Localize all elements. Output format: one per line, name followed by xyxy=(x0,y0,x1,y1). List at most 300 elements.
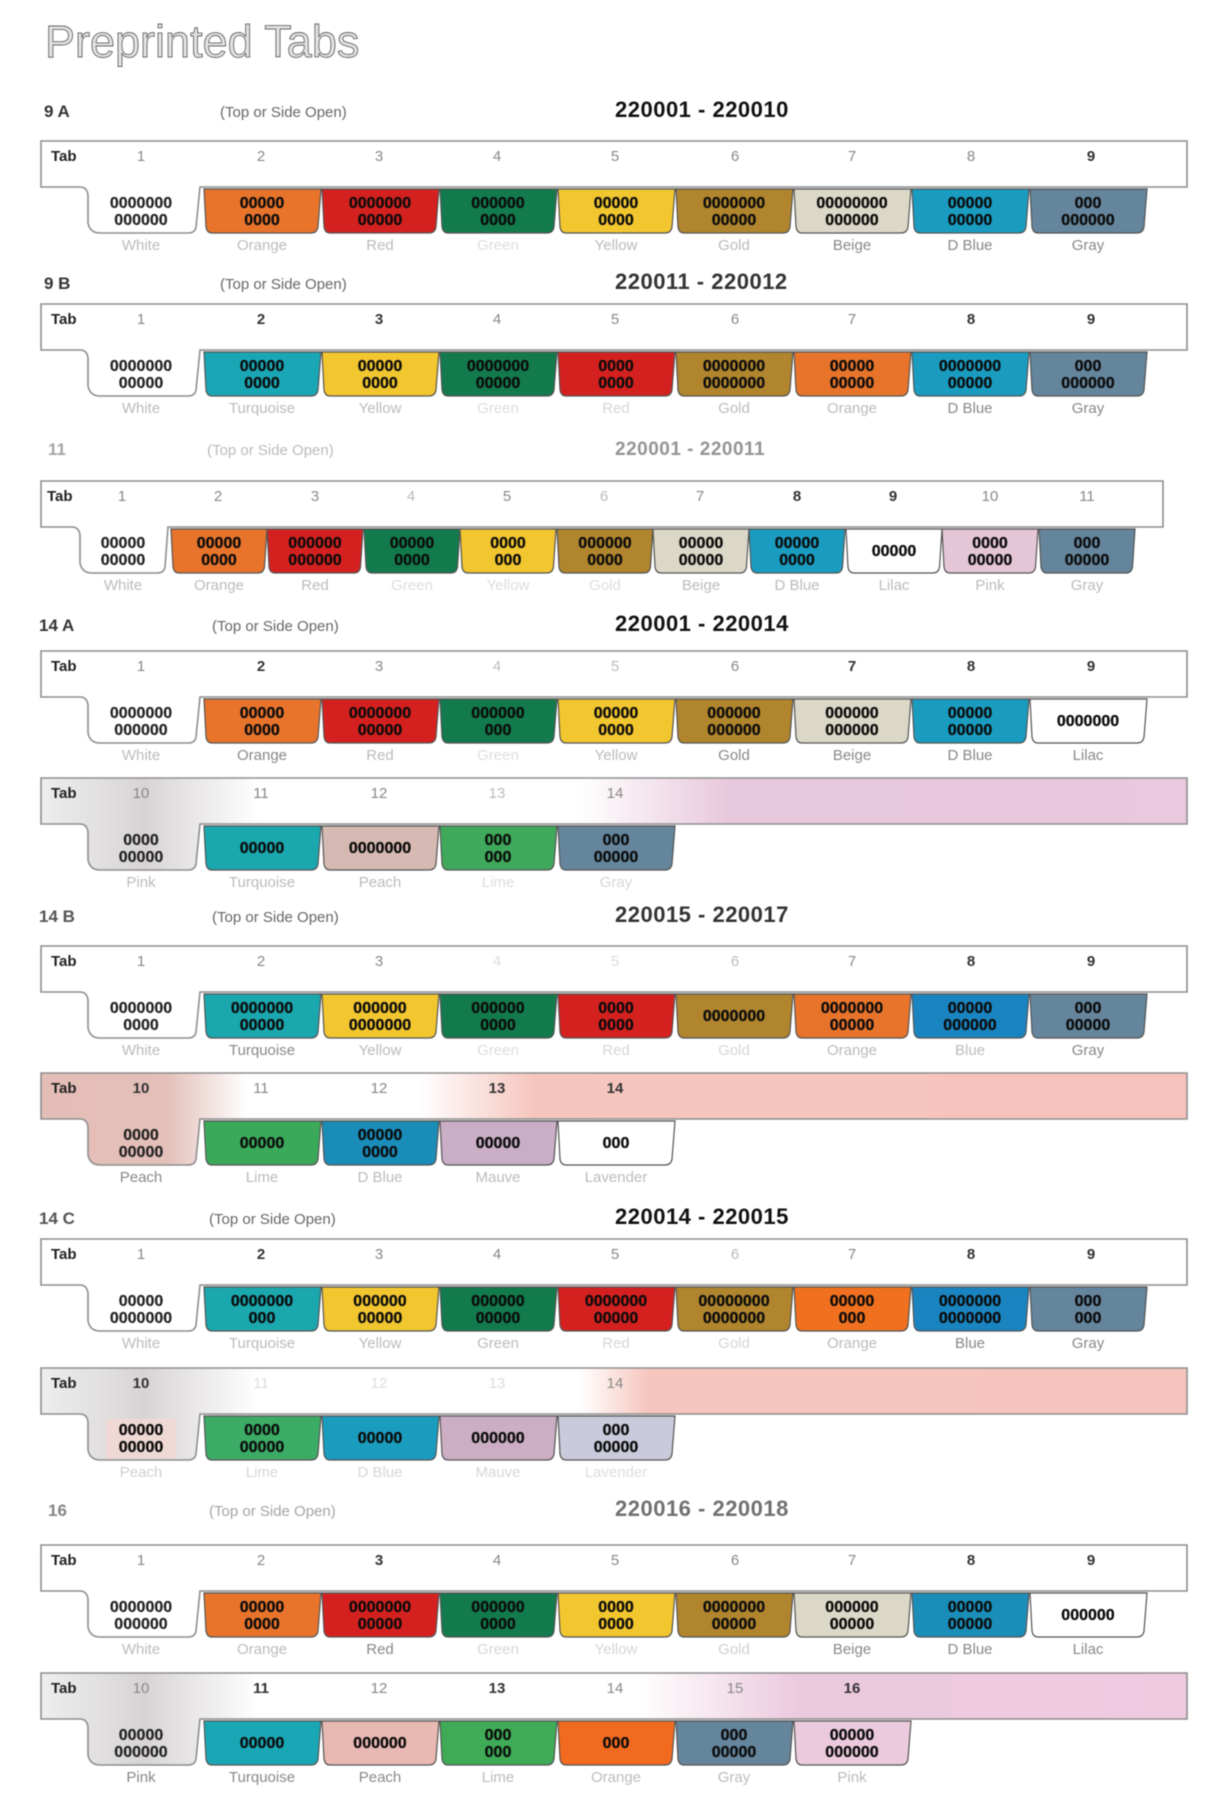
tab: orange: Orange xyxy=(237,237,287,254)
tab: yellow: 0000 xyxy=(362,375,398,392)
tab: dark blue xyxy=(912,189,1029,254)
tab: white: 0000000 xyxy=(110,1000,172,1017)
tab bar: tabs 10 to 16: 12 xyxy=(371,1680,387,1697)
tab bar: tabs 1 to 9: 3 xyxy=(375,658,383,675)
tab bar: tabs 1 to 9 xyxy=(41,651,1187,764)
tab: white: 00000 xyxy=(119,375,163,392)
section heading: 9 A xyxy=(44,102,70,121)
tab: lime: Lime xyxy=(482,1769,514,1786)
tab: green: 0000 xyxy=(480,1616,516,1633)
tab: red xyxy=(558,352,675,417)
tab: dark blue: 00000 xyxy=(948,1599,992,1616)
tab: white: White xyxy=(104,577,142,594)
tab: turquoise: 00000 xyxy=(240,840,284,857)
tab: orange: 0000 xyxy=(244,212,280,229)
tab: red xyxy=(322,1593,439,1658)
tab bar: tabs 1 to 9: 8 xyxy=(967,658,975,675)
title: Preprinted Tabs xyxy=(45,16,359,67)
tab: orange: 0000 xyxy=(244,722,280,739)
tab bar: 5 xyxy=(503,488,511,505)
tab: pink: 000000 xyxy=(114,1744,168,1761)
tab: gold: 0000 xyxy=(587,552,623,569)
tab: green xyxy=(440,1287,557,1352)
tab: peach: 0000 xyxy=(123,1127,159,1144)
tab bar: 4 xyxy=(493,311,501,328)
tab: orange: 00000 xyxy=(197,535,241,552)
section heading: 220014 - 220015 xyxy=(615,1204,789,1229)
tab: gray: 000 xyxy=(721,1727,747,1744)
tab: orange: 000 xyxy=(839,1310,865,1327)
tab: gold: Gold xyxy=(589,577,621,594)
tab: dark blue: D Blue xyxy=(774,577,820,594)
tab: turquoise xyxy=(204,826,321,891)
tab: gold: Gold xyxy=(718,400,750,417)
tab: gray: 000 xyxy=(1075,195,1101,212)
tab bar: tabs 10 to 16: 16 xyxy=(844,1680,860,1697)
tab: red: Red xyxy=(366,237,394,254)
tab: turquoise: 00000 xyxy=(240,1735,284,1752)
tab bar: tabs 10 to 16: 11 xyxy=(253,1680,269,1697)
tab: pink: Pink xyxy=(975,577,1005,594)
tab bar: 9 xyxy=(889,488,897,505)
tab bar: 7 xyxy=(696,488,704,505)
tab: lavender: Lavender xyxy=(585,1464,647,1481)
tab: turquoise: 0000000 xyxy=(231,1293,293,1310)
tab: yellow: 0000 xyxy=(490,535,526,552)
tab: dark blue xyxy=(322,1416,439,1481)
tab: orange xyxy=(204,189,321,254)
tab: gray: 000 xyxy=(603,832,629,849)
tab: orange xyxy=(204,1593,321,1658)
tab: orange: 0000 xyxy=(201,552,237,569)
tab: yellow xyxy=(558,1593,675,1658)
tab bar: tabs 1 to 9: 2 xyxy=(257,1246,265,1263)
tab bar: tabs 1 to 9: 4 xyxy=(493,953,501,970)
section: 9 B xyxy=(41,269,1187,417)
section heading: 14 A xyxy=(39,616,74,635)
tab: orange: 00000 xyxy=(240,195,284,212)
tab bar: tabs 1 to 9: 5 xyxy=(611,1246,619,1263)
tab: gray xyxy=(676,1721,793,1786)
tab: green: 000000 xyxy=(471,705,525,722)
tab: white xyxy=(846,529,942,594)
tab: dark blue: 00000 xyxy=(775,535,819,552)
tab: lavender xyxy=(558,1121,675,1186)
tab: lilac: Lilac xyxy=(1073,1641,1104,1658)
tab: white: 0000000 xyxy=(110,195,172,212)
tab: gold: Gold xyxy=(718,1042,750,1059)
tab: red: 0000 xyxy=(598,375,634,392)
tab bar: tabs 1 to 9: 1 xyxy=(137,1246,145,1263)
tab bar: tabs 1 to 9 xyxy=(41,1239,1187,1352)
tab: orange: 000 xyxy=(603,1735,629,1752)
tab: orange: Orange xyxy=(827,400,877,417)
tab bar: 2 xyxy=(257,148,265,165)
tab: gold: 000000 xyxy=(578,535,632,552)
tab: green: 0000 xyxy=(394,552,430,569)
tab: gray: Gray xyxy=(600,874,633,891)
tab: turquoise: 0000 xyxy=(244,375,280,392)
section heading xyxy=(39,902,789,927)
tab: white: 0000 xyxy=(123,1017,159,1034)
tab: beige: 00000000 xyxy=(816,195,888,212)
tab bar: tabs 10 to 14: 10 xyxy=(133,1375,149,1392)
section heading: 220001 - 220010 xyxy=(615,97,789,122)
tab: red xyxy=(267,529,363,594)
tab: peach: Peach xyxy=(359,874,401,891)
tab: turquoise: 000 xyxy=(249,1310,275,1327)
tab: lilac: 000000 xyxy=(1061,1607,1115,1624)
tab: orange xyxy=(171,529,267,594)
tab: red: Red xyxy=(366,1641,394,1658)
tab: yellow: Yellow xyxy=(595,1641,638,1658)
tab: yellow: 00000 xyxy=(358,358,402,375)
tab bar: 7 xyxy=(848,311,856,328)
tab: pink: Pink xyxy=(837,1769,867,1786)
tab: yellow: Yellow xyxy=(359,1042,402,1059)
tab: orange xyxy=(558,1721,675,1786)
tab bar: tabs 10 to 16 xyxy=(41,1673,1187,1786)
tab: mauve: Mauve xyxy=(475,1169,521,1186)
tab: red: Red xyxy=(366,747,394,764)
tab: gray: Gray xyxy=(1071,577,1104,594)
tab bar: tabs 10 to 14: Tab xyxy=(51,785,77,802)
tab: white: 000000 xyxy=(114,212,168,229)
tab: yellow: Yellow xyxy=(595,747,638,764)
tab: turquoise: 0000000 xyxy=(231,1000,293,1017)
tab bar xyxy=(41,304,1187,417)
tab bar: tabs 10 to 14: 12 xyxy=(371,1375,387,1392)
tab: gray: 000 xyxy=(1075,1293,1101,1310)
tab: green: Green xyxy=(477,400,519,417)
tab: gold xyxy=(557,529,653,594)
tab: red xyxy=(558,1287,675,1352)
tab: lime: 00000 xyxy=(240,1135,284,1152)
tab: beige: Beige xyxy=(833,1641,871,1658)
tab: gray: Gray xyxy=(1072,237,1105,254)
tab: lavender: 000 xyxy=(603,1135,629,1152)
tab bar: 4 xyxy=(493,148,501,165)
tab: green xyxy=(364,529,460,594)
tab: white: 00000 xyxy=(119,1293,163,1310)
tab bar: tabs 1 to 9: 2 xyxy=(257,953,265,970)
tab: gray: Gray xyxy=(1072,1042,1105,1059)
tab: orange: 00000 xyxy=(830,1293,874,1310)
tab: red: 0000000 xyxy=(349,705,411,722)
section heading xyxy=(39,611,789,636)
tab: gold: 000000 xyxy=(707,722,761,739)
tab: lime: 00000 xyxy=(240,1439,284,1456)
tab bar: tabs 1 to 9: 9 xyxy=(1087,953,1095,970)
tab bar: tabs 10 to 14: 13 xyxy=(489,785,505,802)
tab bar: tabs 10 to 16: 14 xyxy=(607,1680,623,1697)
tab: gray: 000 xyxy=(1074,535,1100,552)
tab: white: 00000 xyxy=(101,535,145,552)
tab: gold: 0000000 xyxy=(703,375,765,392)
tab: lime xyxy=(204,1416,321,1481)
section heading: (Top or Side Open) xyxy=(220,276,347,293)
tab: peach xyxy=(322,1721,439,1786)
tab bar: tabs 10 to 14: 12 xyxy=(371,785,387,802)
tab: pink: 00000 xyxy=(968,552,1012,569)
tab bar: tabs 1 to 9: Tab xyxy=(51,953,77,970)
tab bar: 3 xyxy=(375,311,383,328)
tab bar: tabs 1 to 9: 3 xyxy=(375,953,383,970)
tab: gold xyxy=(676,1287,793,1352)
tab bar: tabs 1 to 9: 8 xyxy=(967,1552,975,1569)
tab: white: 000000 xyxy=(114,1616,168,1633)
tab: dark blue: 00000 xyxy=(948,1616,992,1633)
tab: dark blue: 00000 xyxy=(948,722,992,739)
tab: blue xyxy=(912,994,1029,1059)
tab bar: tabs 1 to 9: 2 xyxy=(257,1552,265,1569)
tab: orange: 00000 xyxy=(830,375,874,392)
tab: gray: 000 xyxy=(1075,1000,1101,1017)
tab: gold xyxy=(676,1593,793,1658)
tab: gold: 0000000 xyxy=(703,1599,765,1616)
tab: mauve xyxy=(440,1416,557,1481)
tab: yellow: 000000 xyxy=(353,1000,407,1017)
tab: turquoise: Turquoise xyxy=(229,874,295,891)
tab: dark blue: 00000 xyxy=(948,212,992,229)
tab: white: Lilac xyxy=(879,577,910,594)
tab bar: tabs 1 to 9: 9 xyxy=(1087,1552,1095,1569)
tab: yellow xyxy=(558,699,675,764)
tab: yellow: 00000 xyxy=(594,195,638,212)
tab: gold: 0000000 xyxy=(703,358,765,375)
tab: green: Green xyxy=(477,747,519,764)
tab bar: tabs 1 to 9: Tab xyxy=(51,658,77,675)
tab: pink xyxy=(119,832,163,891)
tab: pink xyxy=(942,529,1038,594)
tab: peach: Peach xyxy=(120,1169,162,1186)
tab: white: 0000000 xyxy=(110,358,172,375)
tab: gray: 00000 xyxy=(594,849,638,866)
tab: gold: Gold xyxy=(718,1335,750,1352)
tab: white xyxy=(110,1599,172,1658)
tab bar: 9 xyxy=(1087,311,1095,328)
tab: gray xyxy=(1030,352,1147,417)
tab: gold xyxy=(676,189,793,254)
tab: gold: Gold xyxy=(718,747,750,764)
tab: mauve xyxy=(440,1121,557,1186)
tab: peach xyxy=(106,1419,176,1481)
tab: lavender xyxy=(558,1416,675,1481)
section heading: (Top or Side Open) xyxy=(220,104,347,121)
tab: pink: 00000 xyxy=(830,1727,874,1744)
tab: lime xyxy=(440,826,557,891)
tab bar: 6 xyxy=(731,311,739,328)
tab: lilac: 0000000 xyxy=(1057,713,1119,730)
tab bar: tabs 1 to 9: 1 xyxy=(137,1552,145,1569)
tab: gold: 0000000 xyxy=(703,1310,765,1327)
tab: orange: 0000000 xyxy=(821,1000,883,1017)
section heading xyxy=(44,269,788,294)
tab: green: Green xyxy=(391,577,433,594)
tab bar: tabs 10 to 14: 10 xyxy=(133,785,149,802)
tab: yellow: Yellow xyxy=(487,577,530,594)
tab: lavender: Lavender xyxy=(585,1169,647,1186)
tab: gray xyxy=(1030,189,1147,254)
tab: blue: 0000000 xyxy=(939,1293,1001,1310)
tab: white xyxy=(101,535,145,594)
tab: blue: Blue xyxy=(955,1335,985,1352)
tab bar: tabs 1 to 9: 6 xyxy=(731,658,739,675)
tab: gray: 000000 xyxy=(1061,212,1115,229)
tab: lime: Lime xyxy=(246,1169,278,1186)
tab bar: tabs 10 to 14 xyxy=(41,1073,1187,1186)
tab: green xyxy=(440,1593,557,1658)
section heading: 14 C xyxy=(39,1209,75,1228)
tab: white: 00000 xyxy=(872,543,916,560)
tab: red: 0000 xyxy=(598,358,634,375)
tab: green xyxy=(440,189,557,254)
tab bar: tabs 10 to 16: 10 xyxy=(133,1680,149,1697)
tab bar: tabs 1 to 9: 6 xyxy=(731,1552,739,1569)
tab bar: tabs 10 to 16: 15 xyxy=(727,1680,743,1697)
tab: blue xyxy=(912,1287,1029,1352)
tab bar: tabs 10 to 14 xyxy=(41,1368,1187,1481)
tab: orange xyxy=(794,352,911,417)
tab bar: tabs 10 to 14: 10 xyxy=(133,1080,149,1097)
tab: pink: 0000 xyxy=(972,535,1008,552)
tab: yellow: Yellow xyxy=(359,400,402,417)
tab: red: 0000000 xyxy=(349,1599,411,1616)
tab: yellow xyxy=(322,352,439,417)
tab bar: 6 xyxy=(731,148,739,165)
tab: dark blue: 0000000 xyxy=(939,358,1001,375)
tab: white: 0000000 xyxy=(110,1310,172,1327)
tab: red xyxy=(322,189,439,254)
tab: peach xyxy=(119,1127,163,1186)
tab: blue: 00000 xyxy=(948,1000,992,1017)
tab: green: Green xyxy=(477,1641,519,1658)
tab: red: 0000000 xyxy=(349,195,411,212)
tab bar: 9 xyxy=(1087,148,1095,165)
tab: orange: 00000 xyxy=(240,705,284,722)
tab bar: tabs 1 to 9: 4 xyxy=(493,658,501,675)
tab bar: 8 xyxy=(793,488,801,505)
tab: red: Red xyxy=(301,577,329,594)
tab bar: 1 xyxy=(137,148,145,165)
tab: lime xyxy=(440,1721,557,1786)
tab: gray xyxy=(558,826,675,891)
tab: pink: 00000 xyxy=(119,1727,163,1744)
tab: yellow: 0000 xyxy=(598,1599,634,1616)
tab: green: 000000 xyxy=(471,1599,525,1616)
tab bar: Tab xyxy=(47,488,73,505)
tab bar: tabs 1 to 9: 7 xyxy=(848,953,856,970)
tab bar: tabs 1 to 9: 4 xyxy=(493,1552,501,1569)
tab: dark blue xyxy=(322,1121,439,1186)
tab: green: 000000 xyxy=(471,195,525,212)
tab: dark blue: 00000 xyxy=(948,705,992,722)
tab: dark blue: 00000 xyxy=(948,375,992,392)
tab: dark blue xyxy=(912,699,1029,764)
tab bar: tabs 10 to 14: 14 xyxy=(607,785,623,802)
section heading: 220016 - 220018 xyxy=(615,1496,789,1521)
tab: beige: 000000 xyxy=(825,705,879,722)
tab: yellow: 0000 xyxy=(598,1616,634,1633)
tab: turquoise xyxy=(204,352,321,417)
section heading xyxy=(48,439,765,460)
tab: yellow: 0000000 xyxy=(349,1017,411,1034)
tab bar: tabs 10 to 14: 12 xyxy=(371,1080,387,1097)
tab: white: White xyxy=(122,1042,160,1059)
tab: beige: 00000 xyxy=(830,1616,874,1633)
tab: green: 000 xyxy=(485,722,511,739)
tab bar: 11 xyxy=(1079,488,1095,505)
tab: turquoise: Turquoise xyxy=(229,400,295,417)
tab: beige: 00000 xyxy=(679,535,723,552)
section heading xyxy=(39,1204,789,1229)
tab bar: tabs 1 to 9: 9 xyxy=(1087,1246,1095,1263)
section heading: 220001 - 220014 xyxy=(615,611,789,636)
tab: pink: 0000 xyxy=(123,832,159,849)
tab: gray xyxy=(1030,1287,1147,1352)
tab: pink: Pink xyxy=(126,874,156,891)
section heading: 220011 - 220012 xyxy=(615,269,788,294)
tab: gold xyxy=(676,699,793,764)
tab bar: 5 xyxy=(611,311,619,328)
section heading: 9 B xyxy=(44,274,70,293)
tab bar: tabs 10 to 14: Tab xyxy=(51,1375,77,1392)
tab: yellow: 0000 xyxy=(598,722,634,739)
tab bar: 3 xyxy=(375,148,383,165)
tab bar: tabs 10 to 14: 13 xyxy=(489,1080,505,1097)
tab: pink: 000000 xyxy=(825,1744,879,1761)
tab: turquoise xyxy=(204,1287,321,1352)
tab bar xyxy=(41,141,1187,254)
tab: white: White xyxy=(122,237,160,254)
tab: gold: 00000000 xyxy=(698,1293,770,1310)
tab: dark blue xyxy=(912,352,1029,417)
tab: beige: Beige xyxy=(682,577,720,594)
tab: lime: 0000 xyxy=(244,1422,280,1439)
section heading: 11 xyxy=(48,440,66,459)
section: 9 A xyxy=(41,97,1187,254)
tab: gold xyxy=(676,994,793,1059)
tab: mauve: Mauve xyxy=(475,1464,521,1481)
tab: gold: 000000 xyxy=(707,705,761,722)
tab bar: tabs 1 to 9 xyxy=(41,1545,1187,1658)
tab: turquoise: 00000 xyxy=(240,358,284,375)
tab: gray: 000 xyxy=(1075,1310,1101,1327)
tab: yellow: 000000 xyxy=(353,1293,407,1310)
tab bar: 2 xyxy=(257,311,265,328)
tab bar: tabs 1 to 9: 1 xyxy=(137,953,145,970)
tab: beige xyxy=(794,1593,911,1658)
tab: orange: 00000 xyxy=(830,358,874,375)
tab: green: Green xyxy=(477,1042,519,1059)
tab: dark blue: D Blue xyxy=(357,1464,403,1481)
tab: gray xyxy=(1039,529,1135,594)
tab bar: tabs 1 to 9: 4 xyxy=(493,1246,501,1263)
tab: green: 00000 xyxy=(390,535,434,552)
tab bar: tabs 1 to 9: 6 xyxy=(731,953,739,970)
tab: turquoise: 00000 xyxy=(240,1017,284,1034)
tab: white: 0000000 xyxy=(110,1599,172,1616)
tab bar: tabs 1 to 9: 7 xyxy=(848,1246,856,1263)
tab: white xyxy=(110,705,172,764)
section heading: 220001 - 220011 xyxy=(615,439,765,460)
tab: red: Red xyxy=(602,1335,630,1352)
tab: beige: Beige xyxy=(833,747,871,764)
tab: red: 000000 xyxy=(288,535,342,552)
tab: mauve: 000000 xyxy=(471,1430,525,1447)
tab bar: Tab xyxy=(51,311,77,328)
tab: lime xyxy=(204,1121,321,1186)
